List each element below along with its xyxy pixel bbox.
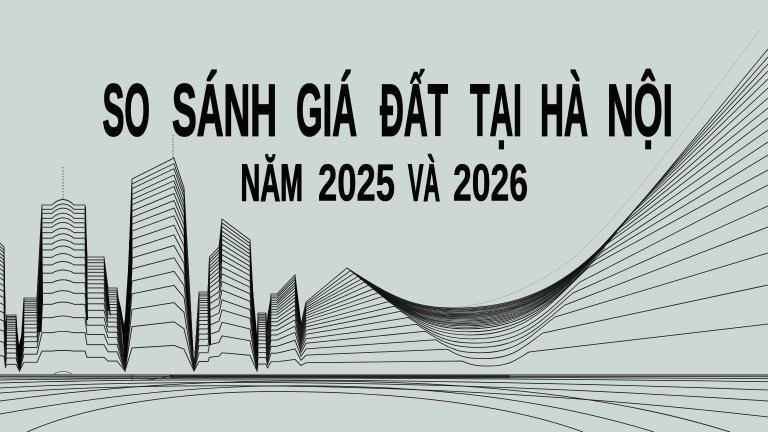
title: TẠI xyxy=(470,70,522,152)
subtitle: 2026 xyxy=(453,154,528,212)
skyline: city towers drawn as nested contour lines xyxy=(0,158,306,371)
title xyxy=(102,70,673,152)
flowing wave lines: hill, valley and rising fan xyxy=(306,49,768,366)
title: GIÁ xyxy=(296,70,357,152)
title: SÁNH xyxy=(172,70,277,152)
antenna: tall tower xyxy=(172,135,174,158)
subtitle: VÀ xyxy=(408,154,440,212)
dotted guide curve xyxy=(440,30,760,309)
subtitle: NĂM xyxy=(240,154,303,212)
title: ĐẤT xyxy=(380,70,448,152)
title: HÀ xyxy=(540,70,588,152)
ground: horizon line with dome and shadow band xyxy=(0,372,768,380)
ground: perspective arcs xyxy=(0,376,768,432)
title: NỘI xyxy=(607,70,673,152)
title: SO xyxy=(102,70,150,152)
dense valley band lines xyxy=(349,183,658,327)
subtitle: 2025 xyxy=(318,154,395,212)
subtitle xyxy=(240,154,528,212)
antenna: left tower xyxy=(62,167,64,199)
skyline dark wall wedges xyxy=(4,181,301,368)
